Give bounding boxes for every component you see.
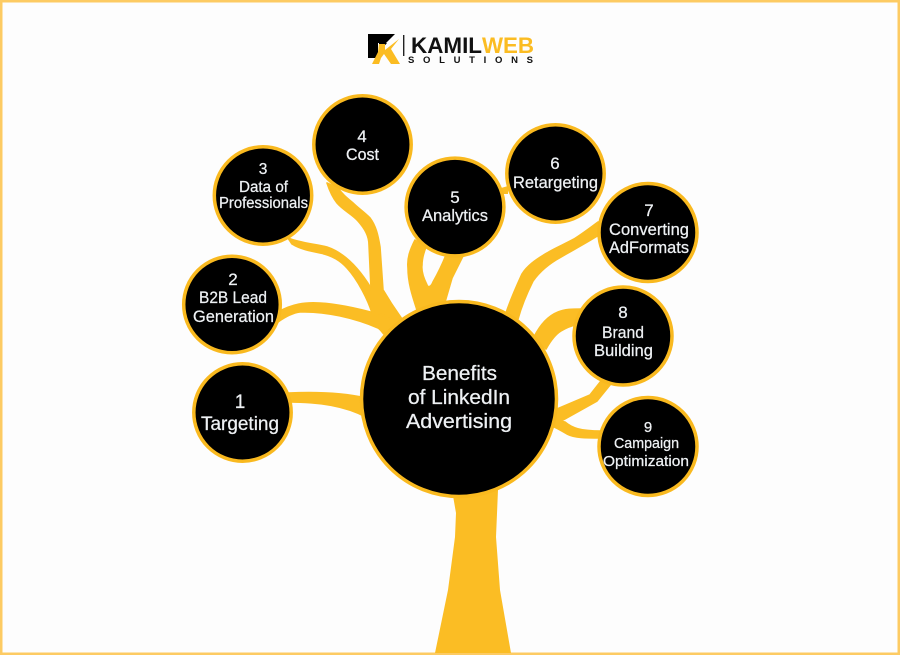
center circle: Benefits [422, 363, 497, 385]
circle 4: Cost [314, 96, 411, 193]
logo wordmark [408, 33, 534, 66]
logo wordmark: SOLUTIONS [408, 55, 533, 66]
branch to 2 [278, 303, 405, 340]
center circle: of LinkedIn [408, 387, 510, 409]
circle 1: Targeting [194, 364, 291, 461]
circle 2: B2B Lead Generation: B2B Lead [199, 288, 267, 307]
circle 9: Campaign Optimization [599, 398, 697, 496]
circle 9: Campaign Optimization: Campaign [614, 435, 679, 452]
branch to 5 [408, 240, 463, 310]
circle 6: Retargeting: 6 [550, 154, 560, 173]
branch to 1 [288, 393, 366, 417]
circle 7: Converting AdFormats [599, 184, 697, 282]
circle 8: Brand Building: Brand [602, 323, 644, 342]
circle 6: Retargeting: Retargeting [513, 173, 598, 192]
circle 3: Data of Professionals: Data of [239, 179, 289, 196]
center circle [362, 302, 556, 496]
circle 7: Converting AdFormats: AdFormats [609, 238, 689, 257]
circle 2: B2B Lead Generation: Generation [193, 307, 274, 326]
branch to 8 lower [555, 381, 610, 423]
circle 7: Converting AdFormats: 7 [644, 201, 654, 220]
logo [368, 33, 534, 66]
branch to 7 [506, 222, 602, 319]
tree [278, 183, 610, 653]
center circle: Advertising [406, 411, 512, 433]
circle 5: Analytics [406, 158, 504, 256]
logo icon [368, 34, 400, 64]
circle 4: Cost: 4 [357, 127, 367, 146]
circle 9: Campaign Optimization: 9 [644, 419, 652, 436]
circle 2: B2B Lead Generation [184, 256, 280, 353]
circle 4: Cost: Cost [346, 145, 379, 164]
circle 5: Analytics: 5 [450, 188, 460, 207]
circle 3: Data of Professionals [214, 147, 312, 244]
circle 1: Targeting: Targeting [201, 414, 279, 435]
circle 2: B2B Lead Generation: 2 [228, 270, 238, 289]
circle 3: Data of Professionals: Professionals [219, 195, 308, 212]
circle 9: Campaign Optimization: Optimization [603, 453, 689, 470]
branch to 8 [534, 309, 582, 349]
connector 5 to 6 [501, 186, 508, 194]
logo wordmark: WEB [482, 33, 534, 58]
circle 3: Data of Professionals: 3 [259, 161, 267, 178]
circle 8: Brand Building: Building [594, 341, 653, 360]
branch junction [372, 288, 405, 345]
branch to 9 [552, 420, 601, 438]
branch to 3 [288, 238, 385, 320]
circle 5: Analytics: Analytics [422, 206, 488, 225]
trunk [435, 490, 511, 653]
circle 6: Retargeting [507, 125, 604, 222]
circle 8: Brand Building [574, 287, 672, 385]
branch to 4 [327, 183, 402, 320]
circle 1: Targeting: 1 [235, 392, 245, 413]
circle 7: Converting AdFormats: Converting [609, 220, 689, 239]
circle 8: Brand Building: 8 [618, 303, 628, 322]
logo wordmark: KAMIL [411, 33, 482, 58]
